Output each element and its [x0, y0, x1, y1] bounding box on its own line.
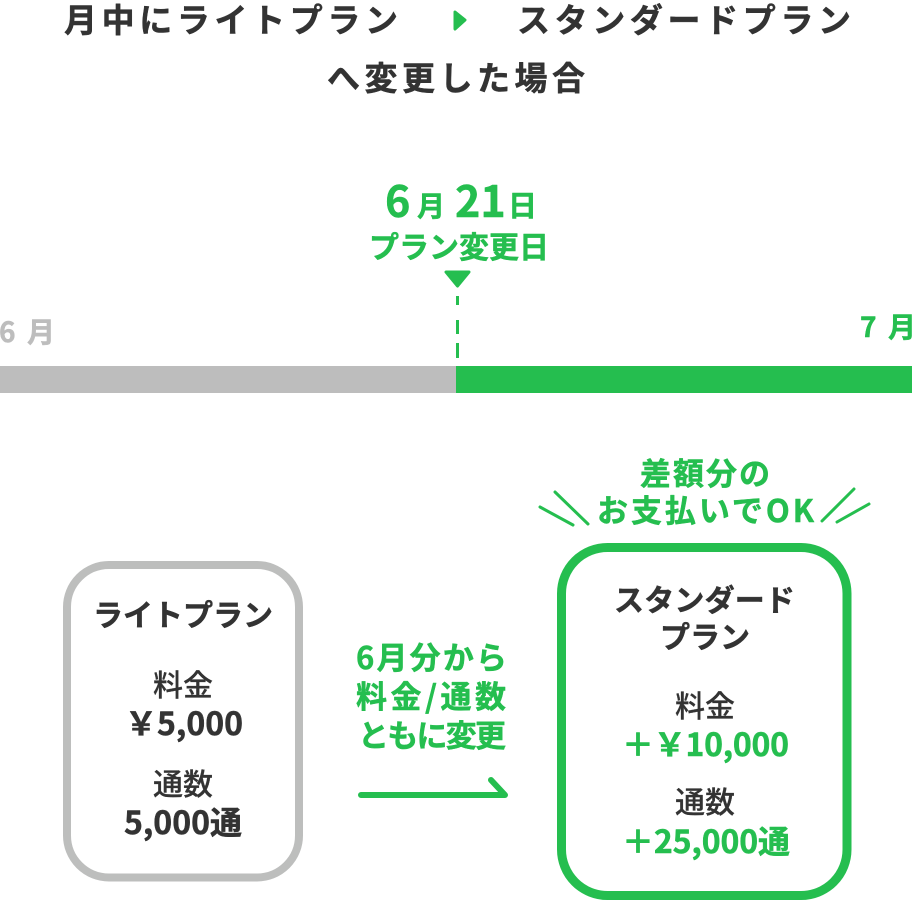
- light plan fee label: 料金: [153, 661, 213, 705]
- date: June 21: 日: [508, 183, 537, 225]
- standard plan messages label: 通数: [675, 778, 735, 822]
- standard plan fee label: 料金: [675, 682, 735, 726]
- standard plan fee value: ＋￥10,000: [622, 720, 789, 766]
- burst lines left: [540, 492, 588, 525]
- callout text: 差額分の: [640, 449, 770, 494]
- callout: pay the difference: お支払いでOK: [597, 486, 815, 531]
- light plan fee value: ￥5,000: [125, 699, 243, 745]
- panel: standard plan: [562, 548, 847, 896]
- panel: light plan: [67, 565, 299, 878]
- light plan heading: ライトプラン: [93, 591, 273, 635]
- icon: title arrow: [455, 12, 465, 29]
- callout: pay the difference: [540, 449, 869, 531]
- panel: standard plan: プラン: [660, 613, 750, 657]
- June label: 6 月: [0, 311, 55, 351]
- June bar: [0, 366, 456, 393]
- date: June 21: 21: [455, 168, 506, 230]
- July bar: [456, 366, 912, 393]
- change note text: 6月分から: [356, 633, 507, 678]
- light plan messages value: 5,000通: [124, 798, 242, 844]
- title line 2: へ変更した場合: [327, 52, 585, 100]
- title: [64, 0, 851, 100]
- burst lines right: [822, 489, 869, 522]
- standard plan messages value: ＋25,000通: [622, 817, 790, 863]
- middle note: [356, 633, 507, 795]
- date: June 21: 6: [385, 168, 410, 230]
- standard plan box: [562, 548, 847, 896]
- date: June 21: 月: [417, 185, 445, 225]
- light plan box: [67, 565, 299, 878]
- timeline: [0, 168, 915, 393]
- arrow: to standard plan: [361, 780, 505, 795]
- marker: triangle and dashed line: [446, 272, 469, 358]
- middle note: 料金/通数: [356, 672, 506, 717]
- standard plan heading: スタンダード: [614, 576, 795, 620]
- plan change day label: プラン変更日: [369, 223, 549, 267]
- middle note: ともに変更: [358, 711, 506, 756]
- light plan messages label: 通数: [153, 760, 213, 804]
- July label: 7 月: [860, 306, 915, 346]
- change date label: [369, 168, 549, 267]
